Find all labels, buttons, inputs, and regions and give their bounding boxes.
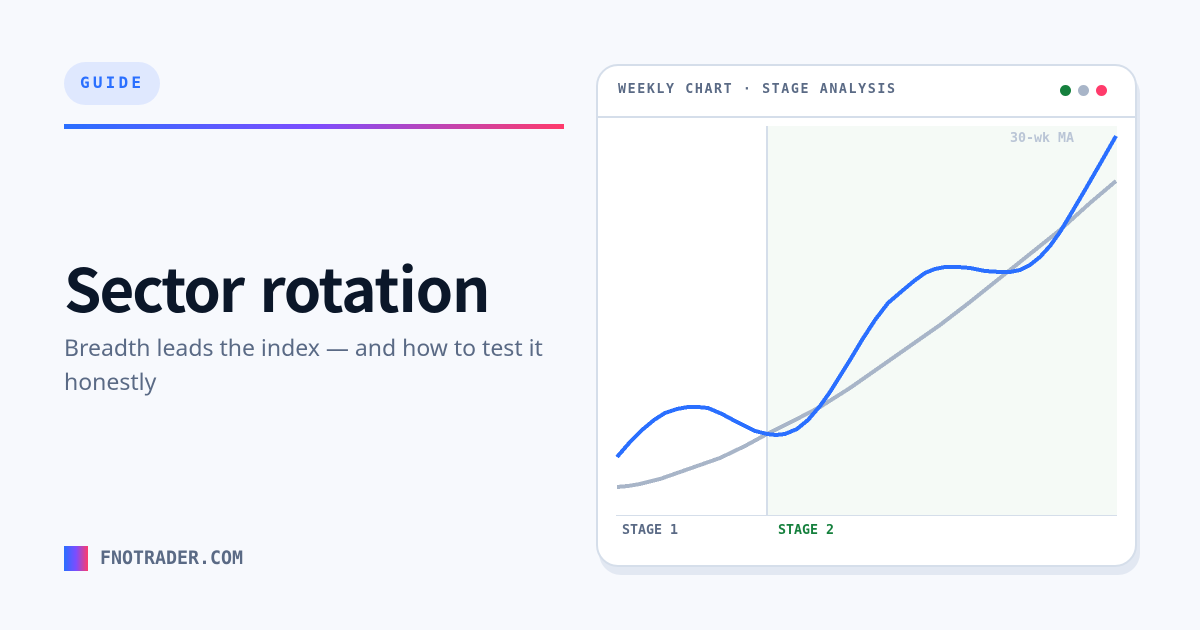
brand name: FNOTRADER.COM <box>100 548 243 569</box>
gradient accent rule <box>64 124 564 129</box>
stage 1 label: STAGE 1 <box>622 523 678 538</box>
window dots <box>1060 85 1107 96</box>
30-week moving average line <box>617 181 1116 487</box>
stage 2 shaded zone <box>768 126 1117 515</box>
price line <box>617 136 1116 457</box>
MA label: 30-wk MA <box>1010 131 1074 146</box>
subtitle: Breadth leads the index — and how to test it honestly <box>64 331 543 397</box>
badge: guide: GUIDE <box>80 73 144 92</box>
chart header label: WEEKLY CHART · STAGE ANALYSIS <box>618 82 897 97</box>
title: Sector rotation <box>64 243 489 330</box>
header divider <box>598 116 1135 118</box>
baseline <box>616 515 1117 516</box>
stage 2 label: STAGE 2 <box>778 523 834 538</box>
panel: weekly chart card <box>596 64 1137 567</box>
badge: guide <box>64 62 160 105</box>
brand <box>64 546 243 571</box>
icon: brand square <box>64 546 88 571</box>
stage divider <box>766 126 768 516</box>
